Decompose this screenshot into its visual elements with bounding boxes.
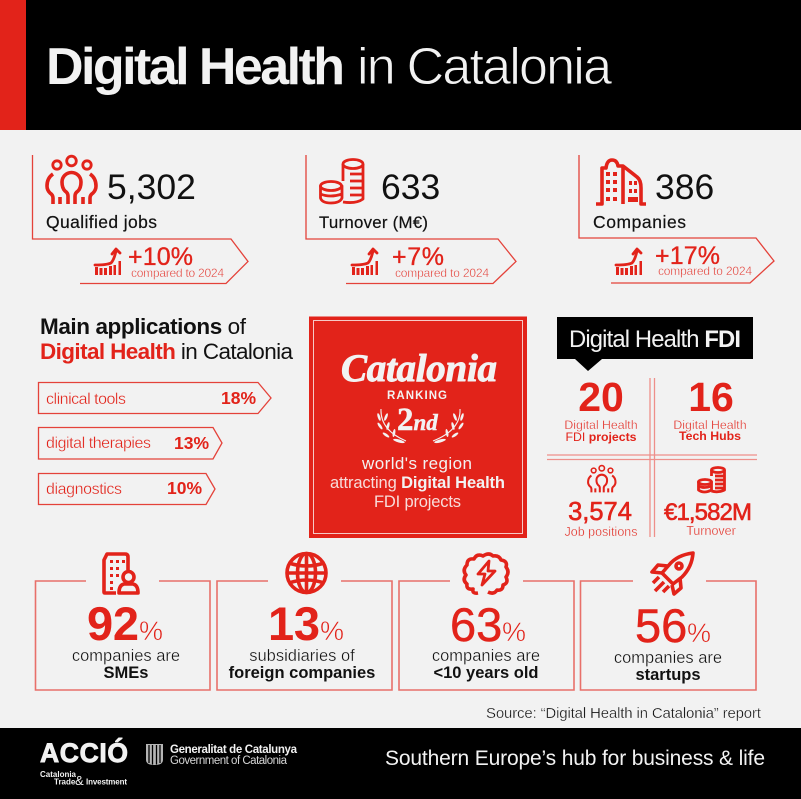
icon: people bbox=[588, 466, 616, 492]
card outline bbox=[579, 155, 774, 283]
stat: FDI projects: 20 bbox=[578, 374, 624, 420]
stat: FDI projects bbox=[564, 374, 638, 444]
heading banner: Digital Health FDI bbox=[569, 326, 741, 353]
title bbox=[46, 38, 612, 96]
tagline: Southern Europe’s hub for business & life bbox=[385, 747, 765, 770]
script wordmark: Catalonia bbox=[341, 347, 497, 390]
description: attracting Digital Health bbox=[330, 474, 505, 492]
panel: young companies: <10 years old bbox=[433, 664, 539, 682]
panel: companies bbox=[579, 155, 774, 283]
bar: diagnostics bbox=[38, 474, 215, 504]
description: subsidiaries of bbox=[249, 647, 355, 665]
panel: SMEs bbox=[36, 554, 210, 690]
bar: diagnostics: diagnostics bbox=[46, 481, 122, 498]
growth value: +17% bbox=[655, 242, 720, 270]
description: world's region bbox=[361, 454, 472, 473]
logo: Generalitat: Government of Catalonia bbox=[170, 755, 288, 767]
icon: brain with bolt bbox=[464, 554, 508, 593]
stat: tech hubs bbox=[673, 374, 747, 443]
card outline bbox=[306, 155, 516, 284]
label: Turnover (M€) bbox=[319, 213, 428, 232]
icon: growth chart bbox=[95, 249, 121, 275]
bar: clinical tools: clinical tools bbox=[46, 391, 126, 408]
grid lines bbox=[547, 378, 757, 537]
icon: coins bbox=[320, 160, 363, 203]
title: in Catalonia bbox=[357, 38, 612, 96]
bar: digital therapies bbox=[38, 428, 222, 459]
panel: young companies: % bbox=[502, 617, 526, 647]
box outline bbox=[217, 581, 392, 690]
stat: job positions bbox=[565, 466, 637, 539]
box outline bbox=[36, 581, 210, 690]
value: 92 bbox=[87, 597, 139, 650]
stat: FDI projects: Digital Health bbox=[564, 418, 638, 432]
source note: Source: “Digital Health in Catalonia” report bbox=[486, 705, 762, 722]
icon: building bbox=[596, 160, 646, 204]
heading: main applications: Main applications of bbox=[40, 314, 247, 339]
comparison note: compared to 2024 bbox=[131, 266, 224, 280]
footer band bbox=[0, 728, 801, 799]
card outline bbox=[32, 155, 248, 284]
panel: startups bbox=[580, 553, 756, 690]
icon: coins bbox=[698, 468, 724, 492]
logo: ACCIO: Trade bbox=[54, 778, 76, 786]
stat: turnover: Turnover bbox=[686, 524, 736, 538]
logo: ACCIO: ACCIÓ bbox=[40, 738, 128, 768]
icon: growth chart bbox=[616, 249, 642, 275]
comparison note: compared to 2024 bbox=[658, 264, 752, 278]
description: FDI projects bbox=[374, 493, 461, 511]
bar: digital therapies: digital therapies bbox=[46, 435, 151, 452]
panel: subsidiaries: foreign companies bbox=[229, 664, 375, 682]
icon: globe bbox=[287, 553, 326, 593]
box outline bbox=[580, 581, 756, 690]
value: 63 bbox=[450, 598, 502, 651]
panel: startups: % bbox=[687, 618, 711, 648]
growth value: +7% bbox=[392, 243, 444, 271]
icon: laurel right bbox=[433, 409, 464, 444]
heading banner bbox=[557, 317, 753, 371]
icon: people bbox=[47, 156, 96, 204]
icon: building with person bbox=[104, 554, 138, 593]
logo: Generalitat: Generalitat de Catalunya bbox=[170, 744, 298, 756]
panel: qualified jobs bbox=[32, 155, 248, 284]
growth value: +10% bbox=[128, 243, 193, 271]
logo: ACCIO: Investment bbox=[86, 778, 127, 786]
title: Digital Health bbox=[46, 38, 345, 96]
panel: young companies bbox=[399, 554, 574, 690]
stat: turnover: €1,582M bbox=[664, 499, 752, 526]
header band bbox=[0, 0, 801, 130]
stat: tech hubs: 16 bbox=[688, 374, 734, 420]
stat: job positions: Job positions bbox=[565, 525, 637, 539]
label: Qualified jobs bbox=[46, 212, 157, 232]
icon: laurel left bbox=[377, 409, 406, 444]
panel: SMEs: SMEs bbox=[104, 664, 148, 682]
heading: main applications bbox=[40, 314, 293, 364]
description: companies are bbox=[614, 649, 722, 667]
bar: clinical tools: 18% bbox=[221, 388, 256, 408]
panel: subsidiaries: % bbox=[320, 616, 344, 646]
logo: ACCIO: & bbox=[75, 773, 84, 788]
value: 633 bbox=[381, 167, 440, 207]
panel: Digital Health FDI bbox=[547, 317, 757, 539]
value: 386 bbox=[655, 167, 714, 207]
description: companies are bbox=[72, 647, 180, 665]
comparison note: compared to 2024 bbox=[395, 266, 489, 280]
rank: 2nd bbox=[397, 402, 438, 438]
icon: growth chart bbox=[352, 249, 378, 275]
value: 56 bbox=[635, 599, 687, 652]
bar: clinical tools bbox=[38, 382, 271, 414]
panel: SMEs: % bbox=[139, 616, 163, 646]
ranking label: RANKING bbox=[387, 390, 447, 402]
stat: turnover bbox=[664, 468, 752, 538]
box outline bbox=[399, 581, 574, 690]
panel: startups: startups bbox=[635, 666, 701, 684]
stat: job positions: 3,574 bbox=[568, 498, 632, 526]
label: Companies bbox=[593, 212, 686, 232]
panel: Catalonia ranking bbox=[309, 316, 527, 538]
logo: ACCIO: Catalonia bbox=[40, 770, 77, 779]
bar: diagnostics: 10% bbox=[167, 478, 202, 498]
panel: subsidiaries bbox=[217, 553, 392, 690]
description bbox=[330, 454, 505, 511]
heading: main applications: Digital Health in Catalonia bbox=[40, 339, 293, 364]
logo: ACCIO bbox=[40, 738, 128, 788]
stat: tech hubs: Digital Health bbox=[673, 418, 747, 432]
description: companies are bbox=[432, 647, 540, 665]
bar: digital therapies: 13% bbox=[174, 433, 209, 453]
panel: turnover bbox=[306, 155, 516, 284]
stat: tech hubs: Tech Hubs bbox=[679, 429, 741, 443]
stat: FDI projects: FDI projects bbox=[565, 430, 637, 444]
logo: Generalitat bbox=[170, 744, 298, 767]
value: 13 bbox=[268, 597, 320, 650]
logo: shield bbox=[146, 744, 163, 765]
value: 5,302 bbox=[107, 167, 196, 207]
icon: rocket bbox=[652, 553, 693, 594]
